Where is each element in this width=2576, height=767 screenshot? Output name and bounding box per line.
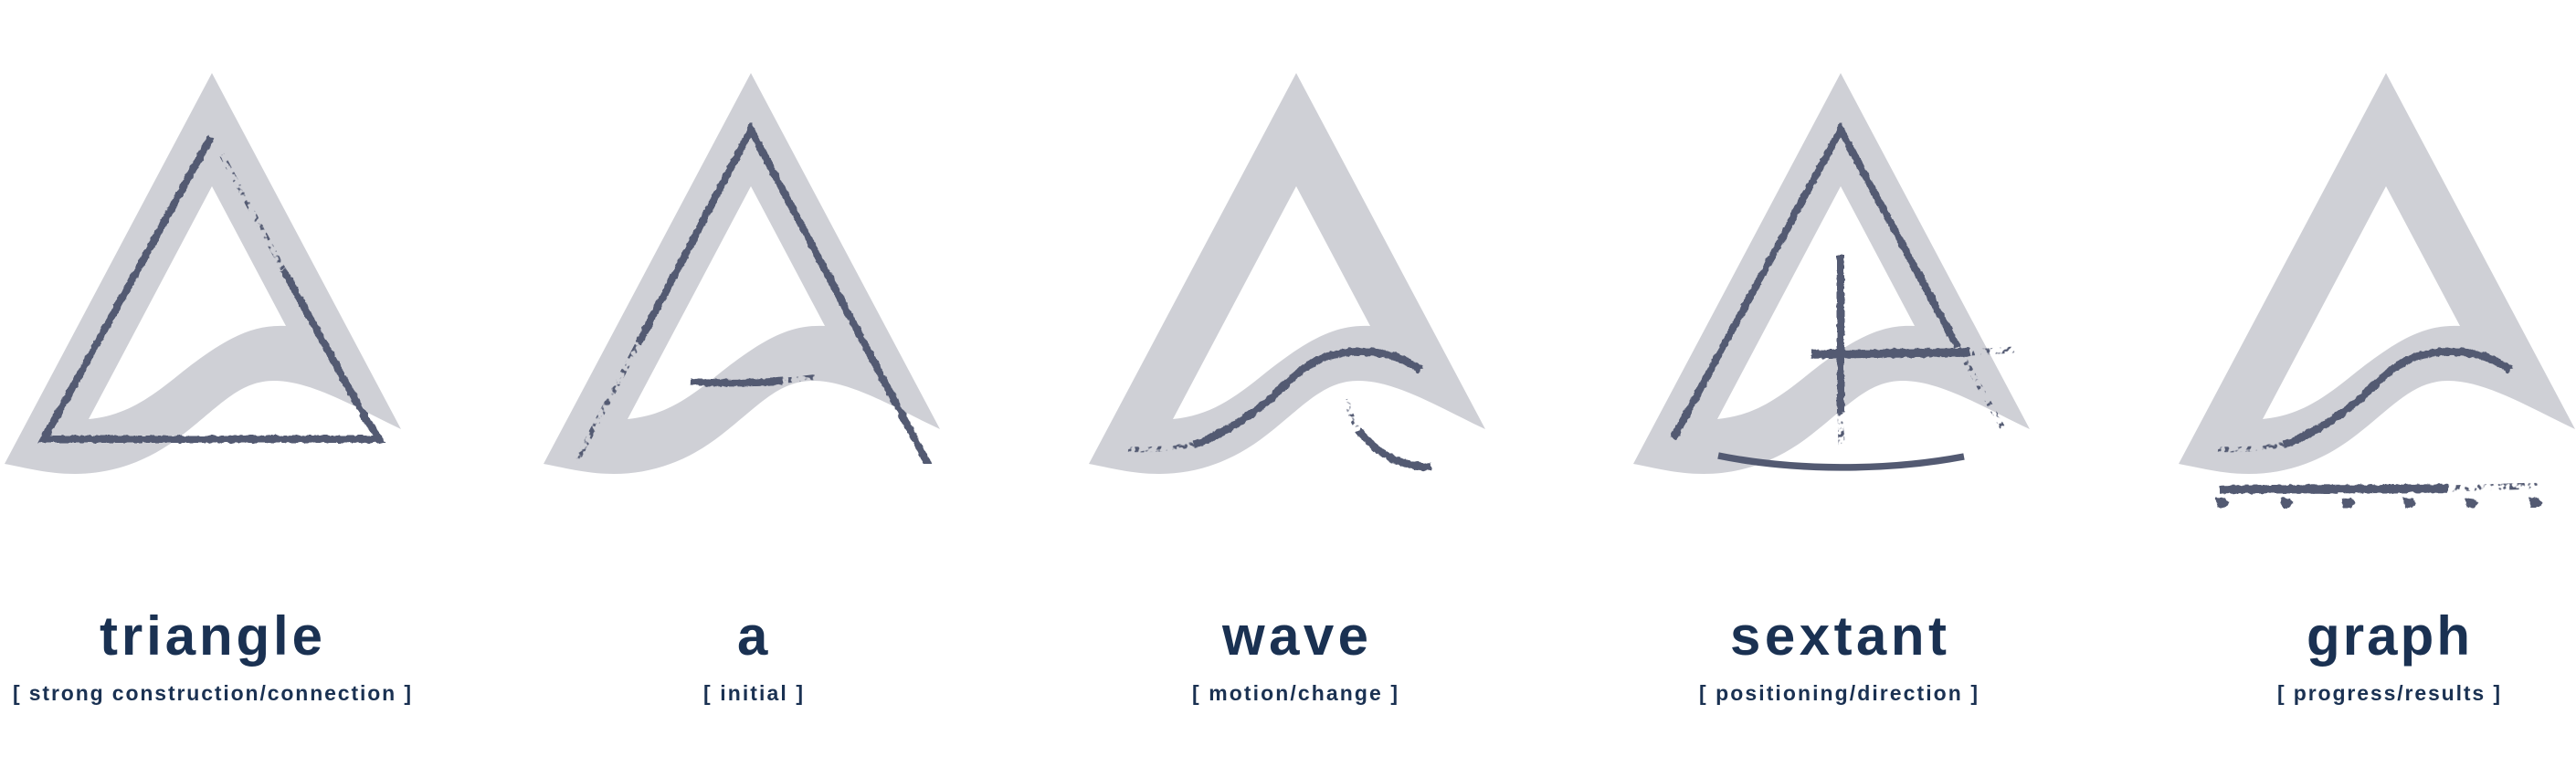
graph ticks	[2215, 498, 2542, 508]
panel: sextant	[1633, 73, 2030, 705]
sextant stroke	[1673, 130, 2014, 468]
caption: progress/results: [ progress/results ]	[2277, 681, 2500, 705]
wave stroke	[1128, 352, 1431, 467]
icon: triangle mark	[5, 73, 401, 474]
icon: graph mark	[2179, 73, 2575, 508]
caption: motion/change: [ motion/change ]	[1192, 681, 1398, 705]
panel: wave	[1089, 73, 1485, 705]
icon: sextant mark	[1633, 73, 2030, 474]
panel: triangle	[5, 73, 411, 705]
triangle stroke	[44, 137, 379, 439]
heading: wave: wave	[1221, 605, 1368, 667]
icon: wave mark	[1089, 73, 1485, 474]
caption: triangle: [ strong construction/connection ]	[13, 681, 411, 705]
panel: graph	[2179, 73, 2575, 705]
a stroke	[575, 130, 931, 469]
heading: sextant: sextant	[1730, 605, 1947, 667]
heading: graph: graph	[2307, 605, 2470, 667]
panel: a	[544, 73, 940, 705]
heading: triangle: triangle	[100, 605, 322, 667]
icon: a mark	[544, 73, 940, 474]
caption: positioning/direction: [ positioning/direction ]	[1699, 681, 1978, 705]
heading: a: a	[737, 605, 768, 667]
caption: initial: [ initial ]	[703, 681, 803, 705]
graph stroke	[2218, 352, 2538, 489]
